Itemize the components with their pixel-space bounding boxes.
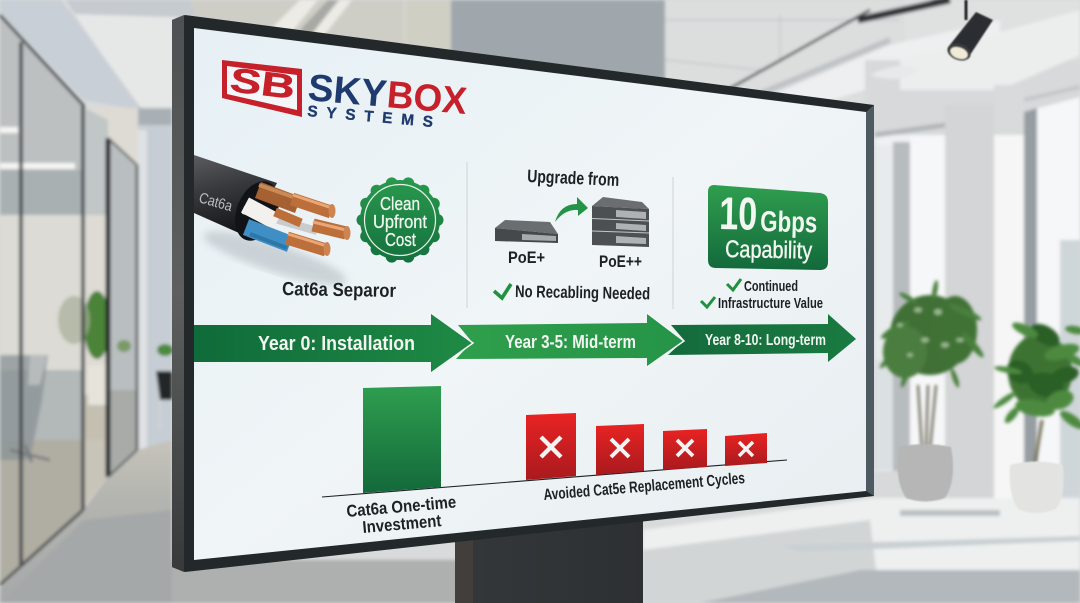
plant: right planter	[992, 319, 1080, 513]
panel: 10Gbps capability	[701, 185, 828, 312]
arrow: Year 3-5 Mid-term: Year 3-5: Mid-term	[505, 332, 636, 352]
panel: PoE upgrade	[494, 166, 650, 303]
badge: 10Gbps: Gbps	[760, 206, 818, 239]
icon: Cat6a cable: Cat6a	[197, 190, 235, 215]
badge: clean upfront cost	[356, 177, 444, 263]
bar: avoided cycle 1	[526, 413, 576, 480]
bar: Cat6a investment	[363, 386, 441, 493]
check: infrastructure value: Infrastructure Value	[718, 295, 823, 312]
arrow: Year 0 Installation	[194, 313, 473, 373]
logo mark	[222, 60, 302, 117]
chairs	[0, 355, 48, 460]
right room wall	[865, 60, 1080, 500]
right floor	[643, 498, 1080, 603]
label: Cat6a investment: Cat6a One-time	[346, 492, 457, 521]
icon: Cat6a cable	[194, 155, 351, 294]
door glass	[108, 138, 137, 477]
badge: 10Gbps: 10	[719, 187, 758, 240]
arrow: Year 8-10 Long-term	[668, 314, 856, 362]
right of door	[145, 110, 172, 450]
right window	[1024, 97, 1080, 513]
left floor	[0, 440, 172, 603]
cable caption: Cat6a Separor	[282, 279, 397, 302]
bar: avoided cycle 4	[725, 433, 767, 466]
screen panel	[194, 28, 866, 560]
ceiling spotlight	[945, 0, 993, 64]
logo: SYSTEMS	[307, 103, 434, 131]
baseline	[322, 460, 787, 497]
label: Cat6a investment	[346, 492, 457, 537]
divider lines	[467, 162, 673, 309]
check: continued: Continued	[744, 278, 798, 295]
check: no recabling needed: No Recabling Needed	[515, 282, 650, 303]
badge: clean upfront cost: Clean	[380, 193, 420, 214]
PoE+ label: PoE+	[508, 248, 545, 267]
logo: BOX	[385, 74, 469, 123]
icon: upgrade arrow	[555, 197, 588, 222]
glass frames	[21, 42, 83, 565]
badge: 10Gbps	[708, 185, 828, 270]
check: no recabling needed	[494, 282, 650, 303]
label: Cat6a investment: Investment	[362, 511, 442, 537]
pot: left planter	[898, 444, 953, 502]
logo	[222, 60, 469, 131]
monitor stand	[455, 520, 643, 603]
ducts top	[190, 0, 404, 50]
pot: right planter	[1010, 462, 1064, 513]
left glass wall 1	[0, 15, 83, 585]
interior plant	[84, 291, 110, 359]
wordmark: SKY	[306, 67, 389, 116]
central column	[405, 0, 451, 70]
arrow: Year 8-10 Long-term: Year 8-10: Long-term	[705, 332, 826, 349]
arrow: Year 0 Installation: Year 0: Installation	[258, 332, 415, 355]
timeline arrows	[194, 313, 856, 373]
upgrade heading: Upgrade from	[527, 166, 620, 190]
logo mark: SB	[228, 61, 297, 107]
pillar	[945, 105, 994, 500]
bar: avoided cycle 3	[663, 429, 707, 470]
arrow: Year 3-5 Mid-term	[456, 313, 684, 367]
middle room	[85, 108, 138, 440]
monitor frame	[172, 15, 874, 572]
left soffit	[0, 0, 146, 470]
badge: clean upfront cost: Upfront	[373, 211, 427, 232]
icon: PoE++ switch stack	[592, 197, 649, 247]
wires	[243, 210, 317, 231]
PoE++ label: PoE++	[599, 252, 642, 271]
badge: 10Gbps: Capability	[725, 236, 812, 265]
plant: left planter	[878, 280, 986, 502]
label: avoided replacement cycles: Avoided Cat5e Replacement Cycles	[543, 470, 746, 504]
cost bar chart	[322, 386, 787, 537]
bar: avoided cycle 2	[596, 424, 644, 475]
panel: cable installation	[194, 155, 444, 302]
ceiling	[60, 0, 1080, 130]
left window	[875, 135, 945, 471]
right ceiling	[665, 0, 905, 120]
badge: clean upfront cost: Cost	[385, 229, 416, 250]
icon: PoE+ switch	[495, 220, 558, 243]
